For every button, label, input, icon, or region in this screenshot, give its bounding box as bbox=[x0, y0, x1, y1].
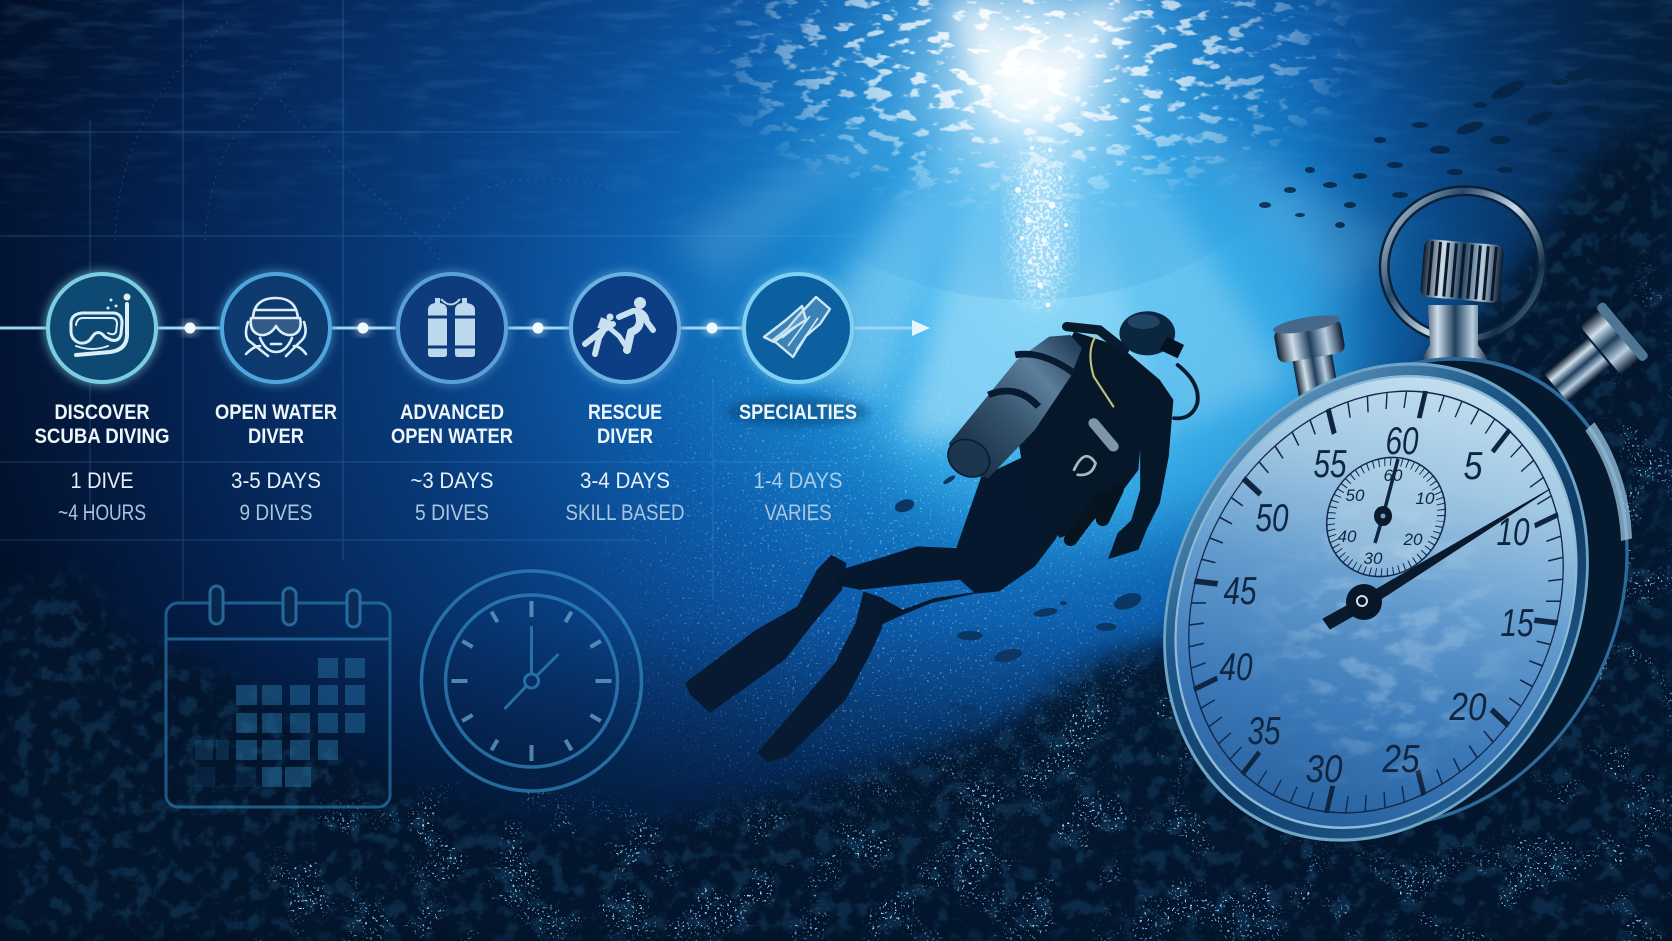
duration: 1 DIVE bbox=[70, 468, 134, 493]
detail: 9 DIVES bbox=[240, 500, 312, 525]
sun core streaks bbox=[940, 0, 1140, 120]
timeline bbox=[0, 274, 930, 525]
background: deep water at the bottom bbox=[0, 620, 1672, 941]
background: surface ripples bbox=[0, 0, 1672, 189]
title: RESCUE bbox=[588, 401, 662, 424]
title bbox=[215, 401, 337, 448]
small fish near the diver bbox=[893, 474, 1144, 714]
diver head and mask bbox=[1119, 311, 1184, 358]
icon: diver face bbox=[222, 274, 330, 382]
title bbox=[391, 401, 513, 448]
label shadow bbox=[726, 397, 870, 427]
dial numbers: 30 bbox=[1306, 748, 1343, 791]
dial numbers: 5 bbox=[1464, 445, 1483, 488]
diver torso and arm bbox=[1017, 332, 1173, 559]
icon: rescuer and victim bbox=[571, 274, 679, 382]
sub dial: 20 bbox=[1403, 530, 1423, 549]
duration: 3-4 DAYS bbox=[580, 468, 670, 493]
title: SPECIALTIES bbox=[739, 401, 857, 424]
sub dial: 60 bbox=[1384, 466, 1403, 485]
crown stem bbox=[1420, 305, 1490, 362]
major ticks bbox=[1145, 370, 1607, 834]
inner bezel bbox=[1130, 355, 1622, 849]
diver tank bbox=[940, 335, 1082, 485]
sub dial: 40 bbox=[1338, 527, 1357, 546]
step 1: Discover Scuba Diving bbox=[34, 274, 170, 525]
title: OPEN WATER bbox=[391, 425, 513, 448]
background: light rays bbox=[670, 60, 1400, 440]
dial numbers: 55 bbox=[1314, 443, 1347, 486]
title: ADVANCED bbox=[400, 401, 504, 424]
title: DISCOVER bbox=[54, 401, 150, 424]
timeline line bbox=[0, 325, 920, 331]
dial numbers: 20 bbox=[1449, 686, 1487, 729]
background: dark right water bbox=[1300, 0, 1672, 941]
sub dial bbox=[1317, 453, 1455, 581]
stopwatch bbox=[1163, 185, 1648, 842]
title: DIVER bbox=[248, 425, 304, 448]
step 5: Specialties bbox=[726, 274, 870, 525]
title bbox=[34, 401, 170, 448]
ghost calendar icon bbox=[166, 586, 390, 807]
surface caustics bbox=[700, 0, 1361, 212]
knurled crown bbox=[1420, 239, 1504, 303]
title: SCUBA DIVING bbox=[34, 425, 170, 448]
step 2: Open Water Diver bbox=[215, 274, 337, 525]
dial numbers: 15 bbox=[1500, 602, 1534, 645]
background: bright water around the diver bbox=[840, 150, 1340, 530]
sub dial: 50 bbox=[1346, 486, 1365, 505]
glass clouds bbox=[1258, 532, 1508, 781]
sub dial: 10 bbox=[1416, 489, 1435, 508]
detail: SKILL BASED bbox=[566, 500, 684, 525]
right pusher bbox=[1533, 301, 1649, 415]
title: OPEN WATER bbox=[215, 401, 337, 424]
icon: snorkel mask bbox=[48, 274, 156, 382]
left pusher bbox=[1272, 312, 1354, 411]
tick ring bbox=[1146, 371, 1606, 833]
detail: 5 DIVES bbox=[415, 500, 489, 525]
dial numbers: 40 bbox=[1220, 646, 1253, 689]
outer bezel bbox=[1116, 342, 1636, 862]
arrow head bbox=[912, 320, 930, 336]
diver legs bbox=[835, 450, 1074, 626]
water sparkles bbox=[582, 252, 1204, 882]
bubble column bbox=[1000, 136, 1080, 320]
sun glow at the surface bbox=[730, 0, 1330, 300]
reef sparkles bbox=[231, 223, 1672, 941]
scuba diver silhouette bbox=[685, 311, 1198, 762]
dial numbers: 50 bbox=[1256, 497, 1289, 540]
dial numbers: 60 bbox=[1386, 420, 1419, 463]
ghost clock icon bbox=[422, 571, 642, 791]
step 4: Rescue Diver bbox=[566, 274, 684, 525]
watch dial group bbox=[1116, 342, 1636, 862]
minor ticks bbox=[1156, 381, 1596, 823]
icon: twin tanks bbox=[398, 274, 506, 382]
duration: 3-5 DAYS bbox=[231, 468, 321, 493]
fish school bbox=[1259, 62, 1636, 228]
detail: ~4 HOURS bbox=[58, 500, 146, 525]
duration: ~3 DAYS bbox=[410, 468, 494, 493]
diver fins bbox=[685, 555, 883, 762]
title bbox=[588, 401, 662, 448]
icon: fins bbox=[744, 274, 852, 382]
dial numbers: 25 bbox=[1382, 738, 1420, 781]
duration: 1-4 DAYS bbox=[754, 468, 842, 493]
ring bow bbox=[1370, 176, 1556, 354]
dial numbers bbox=[1220, 420, 1534, 791]
sub dial: 30 bbox=[1364, 549, 1383, 568]
case side bbox=[1166, 337, 1672, 847]
title: DIVER bbox=[597, 425, 653, 448]
faint HUD grid bbox=[0, 0, 900, 600]
dial numbers: 35 bbox=[1248, 710, 1281, 753]
main hand bbox=[1323, 489, 1550, 629]
timeline dots bbox=[184, 322, 718, 334]
dial numbers: 45 bbox=[1224, 570, 1257, 613]
detail: VARIES bbox=[764, 500, 832, 525]
step 3: Advanced Open Water bbox=[391, 274, 513, 525]
dial numbers: 10 bbox=[1496, 511, 1530, 554]
diver hoses and gear bbox=[1067, 327, 1198, 540]
